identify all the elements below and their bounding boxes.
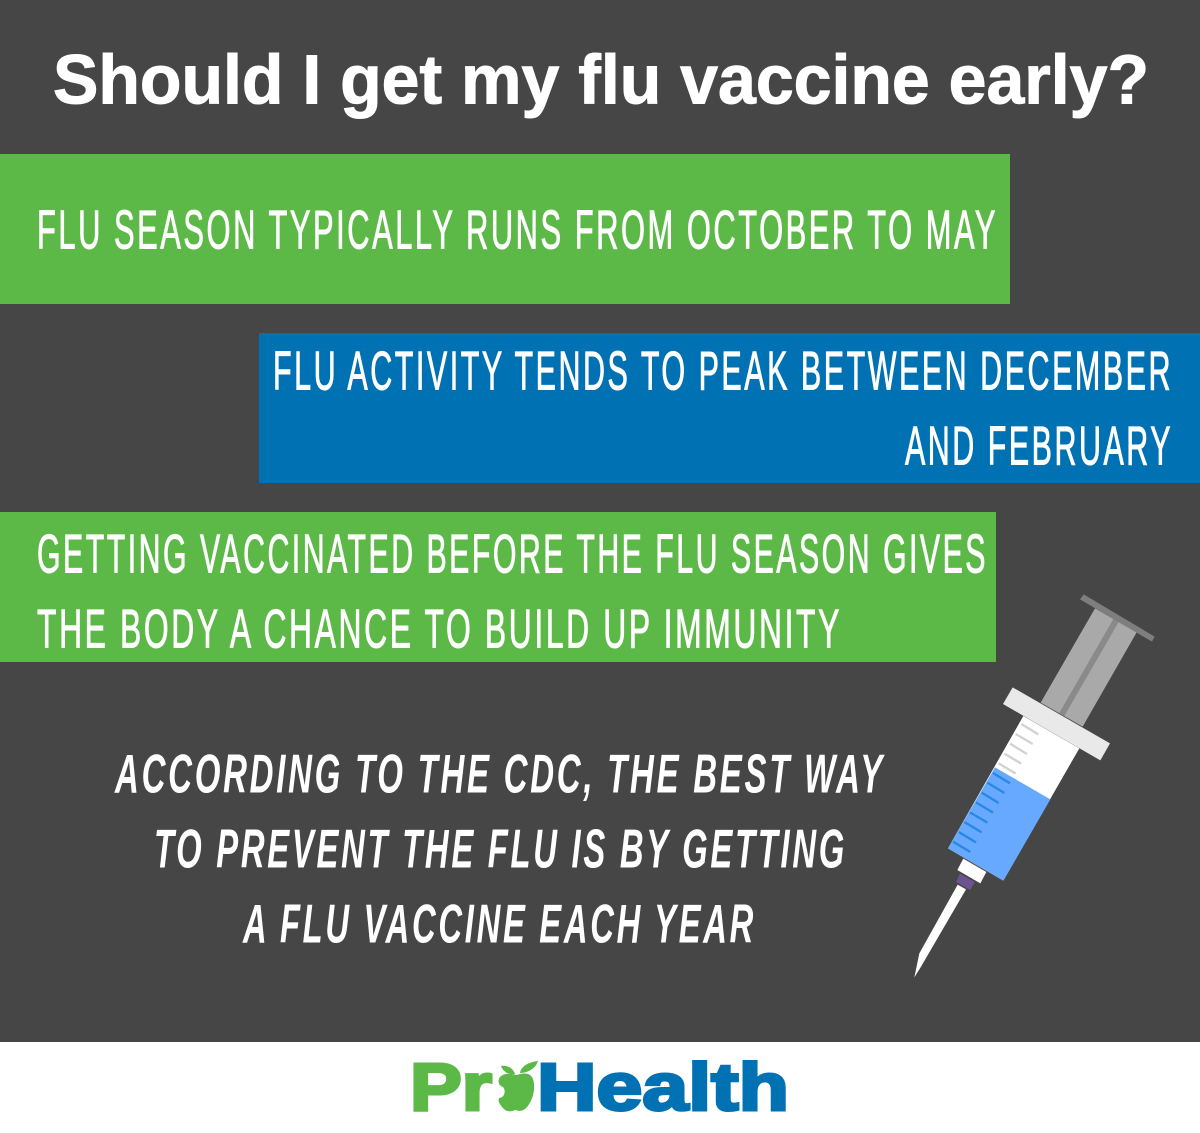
title: Should I get my flu vaccine early? [53, 40, 1149, 118]
footer band [0, 1042, 1200, 1133]
panel: flu activity peak [259, 333, 1200, 483]
icon: syringe [914, 594, 1155, 977]
logo text: Health: Health [537, 1050, 789, 1125]
logo text: Pr: Pr [410, 1050, 492, 1125]
panel: flu season [0, 154, 1010, 304]
CDC recommendation text: A FLU VACCINE EACH YEAR [242, 894, 756, 954]
icon: apple [499, 1061, 538, 1111]
CDC recommendation text [114, 744, 885, 954]
logo: ProHealth [410, 1050, 789, 1125]
panel: build immunity [0, 512, 996, 662]
